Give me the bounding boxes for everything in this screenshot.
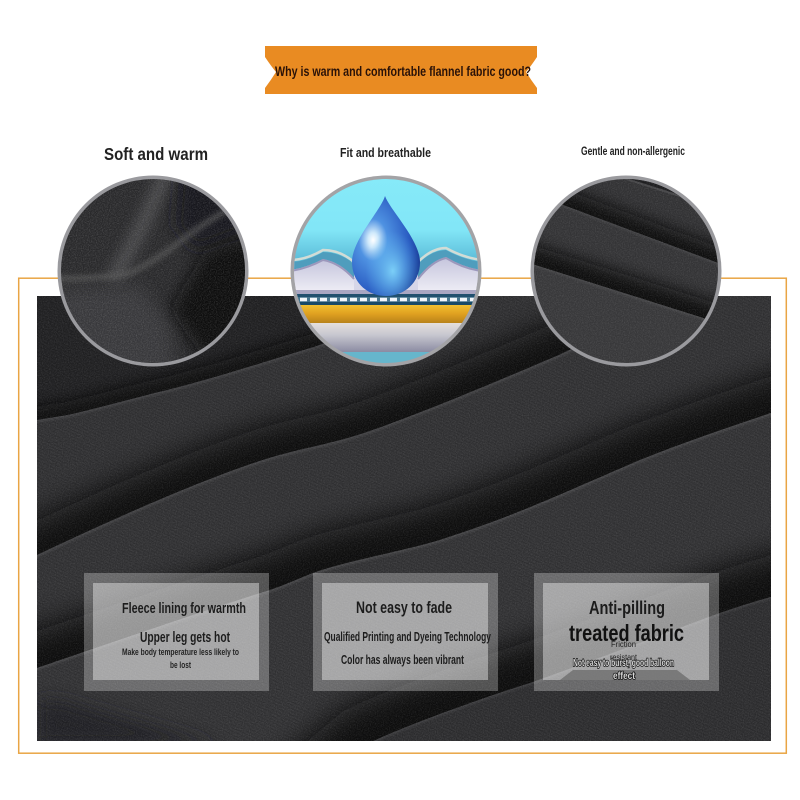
panel: fleece lining: Fleece lining for warmth [122,601,246,617]
panel: not easy to fade [313,573,498,691]
title banner: Why is warm and comfortable flannel fabric good? [275,64,531,79]
panel: anti-pilling [534,573,719,691]
panel: anti-pilling: Not easy to burst, good balloon [573,658,674,669]
main fabric photo [37,296,771,741]
panel: fleece lining: Upper leg gets hot [140,630,230,646]
panel: fleece lining [84,573,269,691]
panel: not easy to fade: Qualified Printing and Dyeing Technology [324,630,491,644]
panel: anti-pilling: effect [613,671,636,682]
heading: fit and breathable: Fit and breathable [340,145,431,160]
panel: anti-pilling: Anti-pilling [589,598,665,618]
panel: fleece lining: be lost [170,660,191,670]
heading: gentle and non-allergenic: Gentle and non-allergenic [581,146,685,158]
circle: woven fabric close-up [530,176,722,366]
panel: not easy to fade: Not easy to fade [356,599,452,617]
panel: anti-pilling: Friction [611,640,636,649]
circle: fleece close-up [58,176,248,366]
panel: anti-pilling: resistant [610,653,638,662]
panel: fleece lining: Make body temperature less likely to [122,647,239,657]
orange frame [19,278,786,753]
panel: anti-pilling: treated fabric [569,620,684,646]
title banner [265,46,537,94]
circle: breathable membrane with water drop icon [290,176,482,368]
heading: soft and warm: Soft and warm [104,144,208,164]
panel: not easy to fade: Color has always been vibrant [341,653,465,667]
icon: water drop [352,196,420,296]
